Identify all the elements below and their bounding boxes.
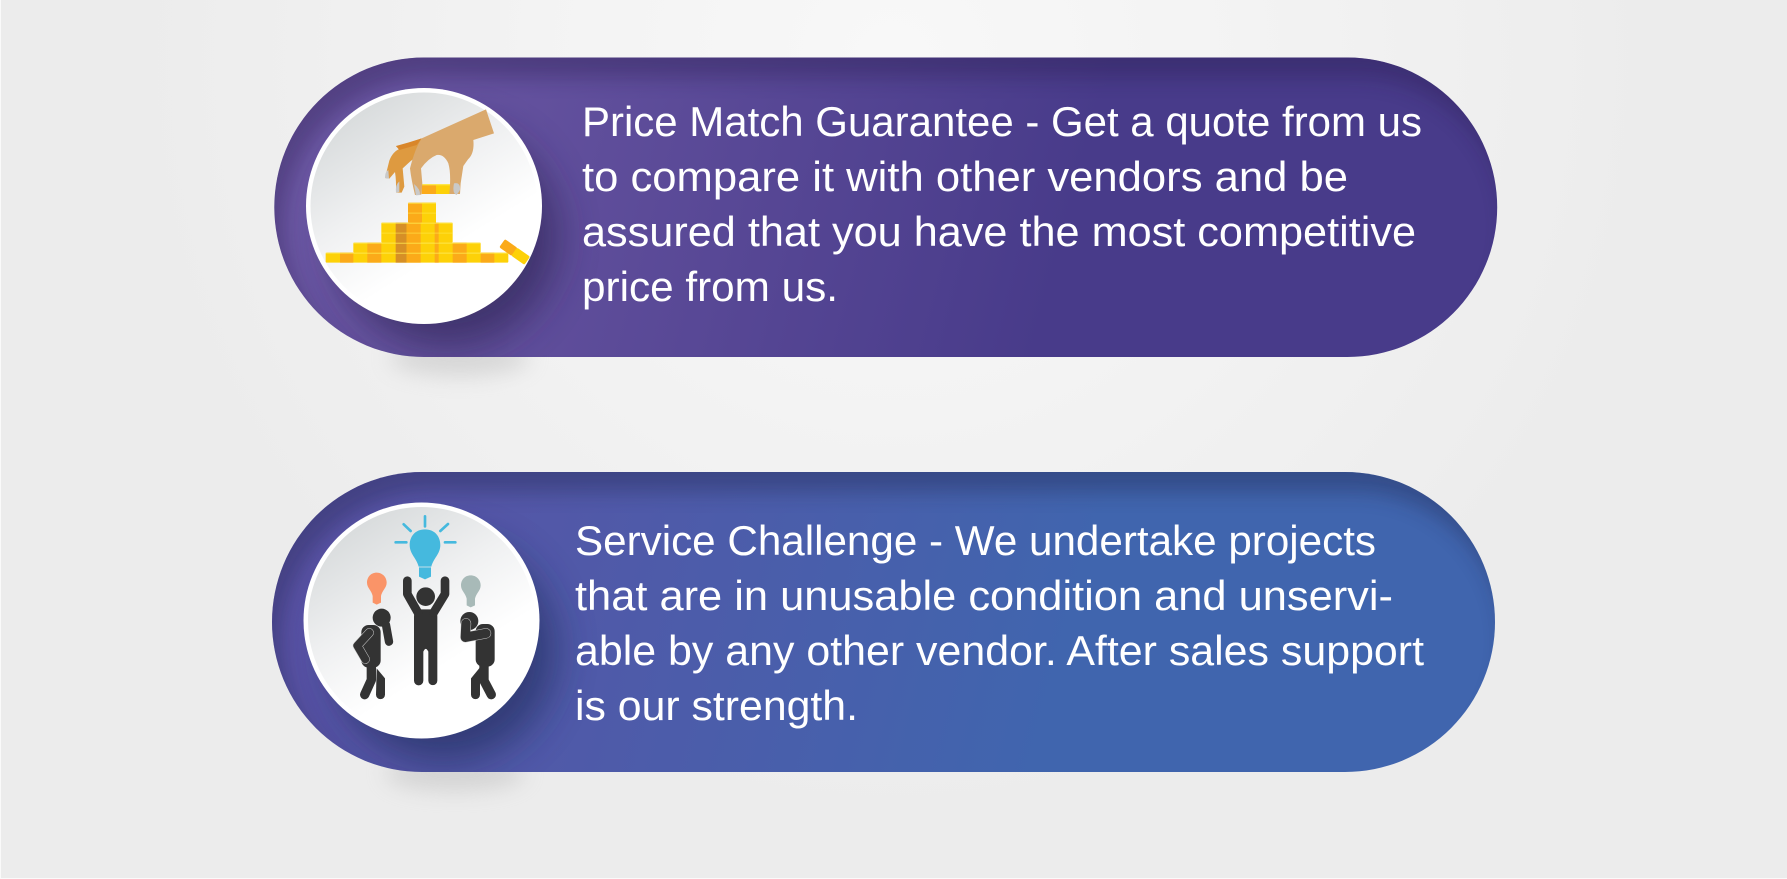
left person (357, 609, 391, 699)
text: service challenge: Service Challenge - We undertake projects (575, 517, 1376, 564)
orange bulb (367, 573, 387, 605)
pill inner and disc shadow (272, 472, 1494, 772)
text: price match guarantee: price from us. (582, 263, 838, 310)
text: price match guarantee: Price Match Guarantee - Get a quote from us (582, 98, 1422, 145)
text: service challenge: that are in unusable condition and unservi- (575, 572, 1393, 619)
text: price match guarantee: assured that you have the most competitive (582, 208, 1416, 255)
icon: hand placing coins on a stack (326, 109, 530, 265)
pill body (272, 472, 1495, 772)
disc (304, 502, 540, 738)
tilted coin (499, 239, 530, 265)
pill ground shadow (390, 340, 530, 376)
text: price match guarantee (582, 98, 1422, 310)
pill body (274, 58, 1497, 357)
gray bulb (461, 575, 481, 607)
coin stack (326, 203, 508, 263)
text: service challenge: is our strength. (575, 682, 858, 729)
front hand (410, 109, 494, 195)
icon: three people with light bulbs (357, 516, 495, 699)
text: service challenge (575, 517, 1424, 729)
finger nails (385, 170, 460, 195)
panel: price match guarantee (274, 58, 1498, 381)
center person (407, 581, 445, 685)
pill ground shadow (385, 755, 525, 791)
disc (306, 88, 542, 324)
pill inner and disc shadow (274, 58, 1494, 357)
right person (460, 612, 495, 699)
held coin (422, 184, 450, 194)
panel: service challenge (272, 472, 1495, 796)
back fingers (385, 138, 422, 193)
text: price match guarantee: to compare it with other vendors and be (582, 153, 1348, 200)
text: service challenge: able by any other vendor. After sales support (575, 627, 1424, 674)
blue bulb with rays (396, 516, 455, 579)
